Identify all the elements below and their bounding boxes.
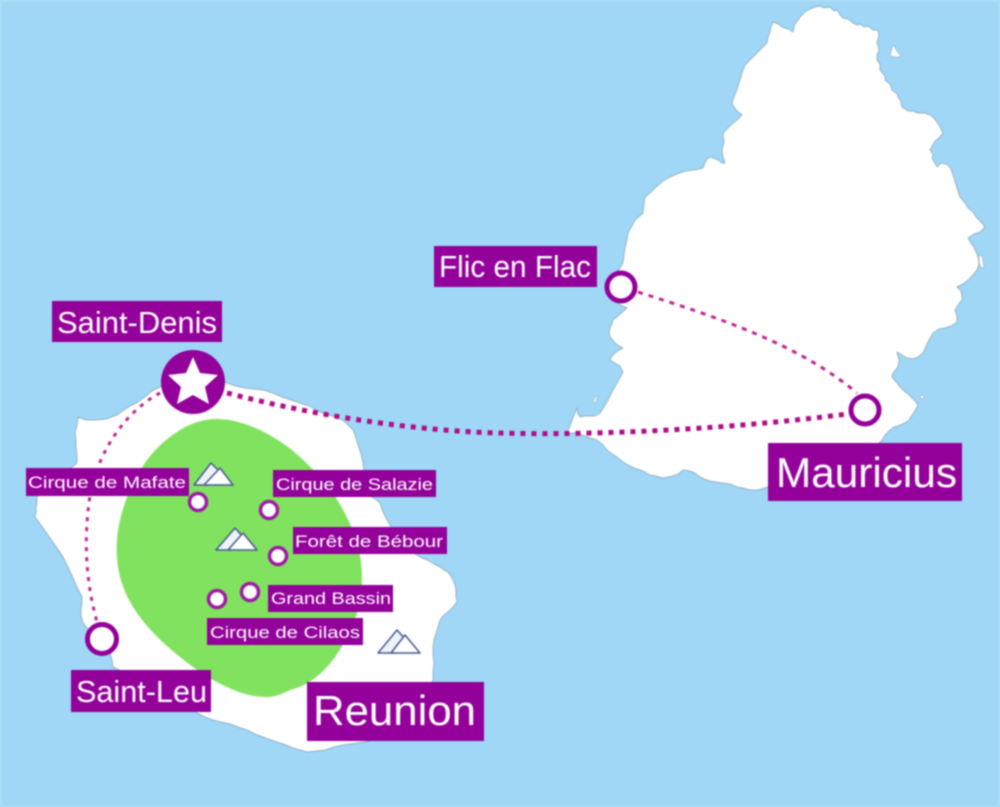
label: Cirque de Cilaos: Cirque de Cilaos [210, 623, 360, 642]
marker: Foret de Bebour [270, 548, 286, 564]
label: Grand Bassin: Grand Bassin [271, 589, 391, 608]
label: Foret de Bebour: Forêt de Bébour [295, 532, 443, 551]
marker: Cirque de Mafate [190, 494, 206, 510]
label: Grand Bassin [268, 585, 393, 612]
marker: Saint-Denis star [161, 350, 225, 414]
marker: Saint-Leu [88, 624, 116, 654]
island: Mauritius [567, 6, 985, 490]
label: Reunion: Reunion [313, 687, 476, 734]
marker: Flic en Flac [607, 273, 635, 301]
label: Flic en Flac: Flic en Flac [439, 249, 591, 284]
label: Mauricius: Mauricius [776, 449, 957, 496]
island: Reunion [35, 378, 457, 752]
icon: mountain centre [216, 528, 257, 550]
marker: Mauricius [851, 396, 879, 424]
marker: Grand Bassin [242, 584, 258, 600]
label: Cirque de Salazie [273, 470, 436, 497]
route: Saint-Denis to Saint-Leu [86, 393, 160, 622]
label: Cirque de Salazie: Cirque de Salazie [276, 475, 433, 494]
label: Foret de Bebour [293, 527, 447, 554]
label: Cirque de Mafate: Cirque de Mafate [28, 473, 186, 492]
label: Cirque de Mafate [26, 468, 189, 496]
icon: mountain south-east [378, 630, 420, 653]
label: Cirque de Cilaos [207, 618, 363, 645]
icon: mountain north [194, 463, 233, 485]
national park green area [117, 419, 362, 697]
marker: Cirque de Salazie [260, 502, 278, 518]
marker: Cirque de Cilaos [208, 590, 226, 608]
label: Saint-Denis: Saint-Denis [57, 305, 217, 340]
route: Flic en Flac to Mauricius [638, 292, 857, 393]
label: Saint-Leu: Saint-Leu [76, 674, 207, 709]
route: Saint-Denis to Mauricius [227, 393, 847, 434]
